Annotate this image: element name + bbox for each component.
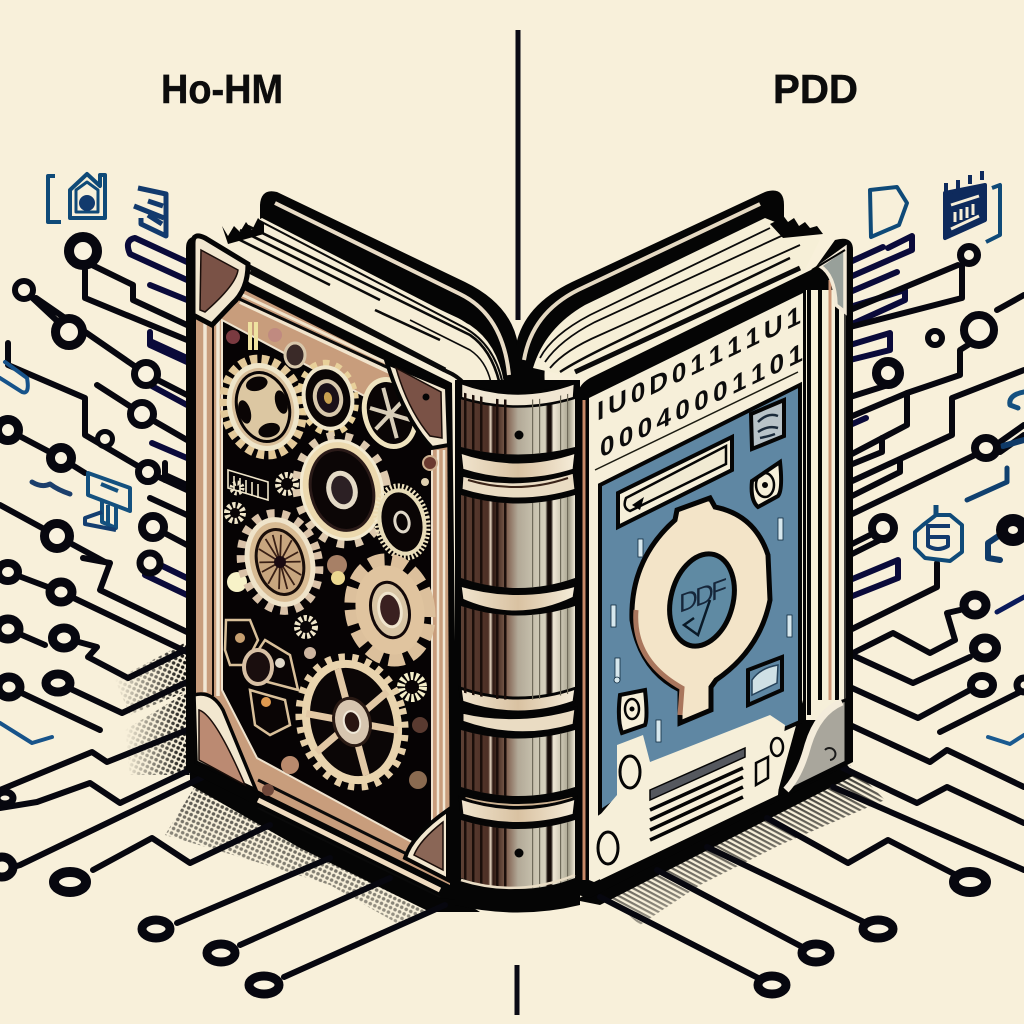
gears [215,322,438,797]
spine section four [461,730,575,796]
spine stud top [514,430,524,440]
spine band pair one [460,452,576,499]
book: pages left [222,218,505,392]
search bar [618,437,732,527]
icon: number six tag [915,505,962,561]
gear 7 [342,553,438,667]
icons: top right [870,171,1000,561]
title: Ho-HM: Ho-HM [161,66,283,112]
corner: bottom right of left cover [405,810,448,880]
icon: left round target [619,690,646,733]
spine section one [461,392,575,454]
cover black panel [222,320,432,853]
icon: bracket [48,176,61,222]
corner: top right of left cover [387,363,449,448]
corner: top right [812,248,845,312]
spine section two [461,495,575,588]
cover outline [186,236,458,900]
circuit nodes: left side [0,237,279,994]
book: back cover right [516,191,784,392]
icon: pill button [748,657,782,705]
gear 4 [288,429,396,551]
corner: bottom left [194,694,256,790]
cover cream panel [589,293,803,882]
gear 5 [370,482,434,562]
divider: top vertical line [516,30,520,320]
spine stripe detail [464,385,572,895]
spine stud bottom [514,848,524,858]
book: front cover left [186,236,458,900]
spine [455,380,580,912]
icon: chip [945,171,985,238]
gear 1 [215,352,311,462]
icon: house [70,174,105,218]
corner: top left [193,236,248,325]
icon: wifi square [751,400,784,449]
magnifier key [632,498,770,723]
cover frame [196,288,450,885]
spine section three [461,606,575,700]
binary row two: 0 0 0 4 0 0 0 1 1 0 1 [600,337,803,464]
hatched shadow: right of book [575,762,885,925]
icon: stacked lines [134,188,166,236]
lower cream tab with stripes [598,715,785,880]
title: PDD: PDD [773,66,858,112]
icons: top left [48,174,166,530]
binary row one: I U 0 D 0 1 1 1 1 U 1 [597,299,801,427]
label plate [228,470,268,500]
circuit nodes: right side [758,246,1024,994]
icon: document [870,187,907,237]
divider: bottom vertical line [514,965,520,1015]
corner: bottom right [785,700,846,792]
circuit traces: right side [600,236,1024,980]
spine base [455,380,580,912]
spine top cap [461,383,575,406]
icon: target [752,462,781,507]
gear 6 [233,507,327,617]
icon: right bracket [986,185,1000,242]
magnifier text: DDF [679,572,727,619]
cover outline [578,239,853,898]
spine bottom lip [461,875,575,888]
spine band pair four [460,795,576,824]
circuit traces: left side [0,238,445,977]
edge stripes [806,250,846,720]
small gears row [226,322,437,796]
book: pages right [533,214,823,380]
halftone shadow: left of book [115,640,480,925]
spine band pair three [460,688,576,733]
spine band two [460,585,576,612]
gear 3 [357,374,423,452]
gear 8 spoked wheel [287,647,417,797]
small dashes on blue panel [611,518,792,742]
book: front cover right [578,239,853,898]
gear 2 [295,359,361,437]
icon: screen on stand [85,473,130,530]
blue panel [600,385,800,812]
gear 9 linked cells [225,620,298,735]
book: back cover left [260,191,518,392]
spine section five [461,820,575,889]
